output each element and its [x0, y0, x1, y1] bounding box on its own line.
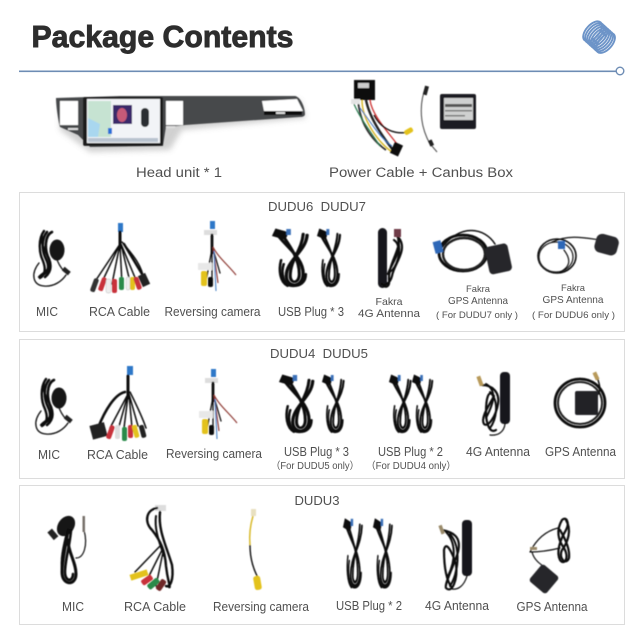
icon: mic [36, 379, 73, 434]
icon: Fakra GPS antenna (DUDU6) [538, 232, 620, 273]
label: mic: MIC [36, 305, 58, 319]
power cable and canbus box image [351, 80, 476, 157]
label: Fakra GPS antenna (DUDU7): Fakra [466, 284, 491, 295]
icon: Fakra GPS antenna (DUDU7) [433, 230, 513, 275]
icon: GPS antenna [555, 372, 605, 427]
label: mic: MIC [62, 600, 84, 614]
label: Fakra GPS antenna (DUDU7) [436, 284, 518, 321]
head unit image [56, 96, 306, 152]
icon: USB plugs [343, 518, 392, 587]
icon: coil [580, 18, 618, 56]
title: Package Contents [32, 19, 294, 54]
label: reversing camera: Reversing camera [166, 447, 262, 461]
icon: USB plugs (DUDU4) [389, 375, 432, 432]
label: Fakra GPS antenna (DUDU6) [532, 283, 615, 321]
label: USB plug (DUDU4) [366, 445, 456, 472]
label: USB plug: USB Plug * 3 [278, 305, 344, 319]
label: RCA cable: RCA Cable [124, 600, 186, 614]
label: RCA cable: RCA Cable [87, 448, 148, 462]
heading: DUDU3 [294, 494, 340, 508]
label: Fakra GPS antenna (DUDU6): ( For DUDU6 only ) [532, 310, 615, 321]
label: RCA cable: RCA Cable [89, 305, 150, 319]
panel: DUDU4 DUDU5 [20, 340, 624, 478]
panel: DUDU6 DUDU7 [20, 192, 624, 332]
label: GPS antenna: GPS Antenna [545, 445, 616, 459]
panel: DUDU3 [20, 486, 624, 624]
label: Fakra GPS antenna (DUDU7): ( For DUDU7 only ) [436, 310, 518, 321]
label: 4G antenna: 4G Antenna [425, 599, 489, 613]
label: USB plug: USB Plug * 2 [336, 599, 402, 613]
label: Fakra 4G antenna [358, 296, 421, 320]
label: Fakra 4G antenna: Fakra [376, 296, 403, 308]
icon: RCA cable [90, 223, 150, 293]
icon: reversing camera [250, 509, 262, 590]
heading: DUDU4 DUDU5 [270, 347, 368, 361]
icon: reversing camera [199, 369, 237, 439]
label: mic: MIC [38, 448, 60, 462]
label: USB plug (DUDU5) [271, 445, 359, 472]
label: Fakra GPS antenna (DUDU7): GPS Antenna [448, 295, 508, 307]
icon: USB plugs [272, 229, 340, 286]
label: USB plug (DUDU5): （For DUDU5 only） [271, 460, 359, 472]
label: USB plug (DUDU4): USB Plug * 2 [378, 445, 443, 459]
heading: DUDU6 DUDU7 [268, 200, 366, 214]
head unit label: Head unit * 1 [136, 165, 222, 180]
label: USB plug (DUDU4): （For DUDU4 only） [366, 460, 456, 472]
icon: RCA cable [89, 366, 147, 441]
icon: reversing camera [198, 221, 236, 291]
icon: mic [34, 231, 71, 286]
header rule [19, 67, 624, 75]
label: Fakra GPS antenna (DUDU6): Fakra [561, 283, 586, 294]
icon: 4G antenna [476, 372, 510, 435]
label: GPS antenna: GPS Antenna [516, 600, 588, 614]
icon: GPS antenna [529, 519, 569, 594]
icon: mic [47, 512, 86, 583]
icon: USB plugs (DUDU5) [279, 375, 344, 432]
label: Fakra GPS antenna (DUDU6): GPS Antenna [542, 294, 604, 306]
label: reversing camera: Reversing camera [164, 305, 261, 319]
label: Fakra 4G antenna: 4G Antenna [358, 308, 421, 320]
label: 4G antenna: 4G Antenna [466, 445, 530, 459]
icon: Fakra 4G antenna [378, 228, 402, 288]
label: USB plug (DUDU5): USB Plug * 3 [284, 445, 349, 459]
icon: RCA cable [130, 505, 173, 592]
icon: 4G antenna [438, 520, 472, 589]
label: reversing camera: Reversing camera [213, 600, 309, 614]
power cable label: Power Cable + Canbus Box [329, 165, 513, 180]
